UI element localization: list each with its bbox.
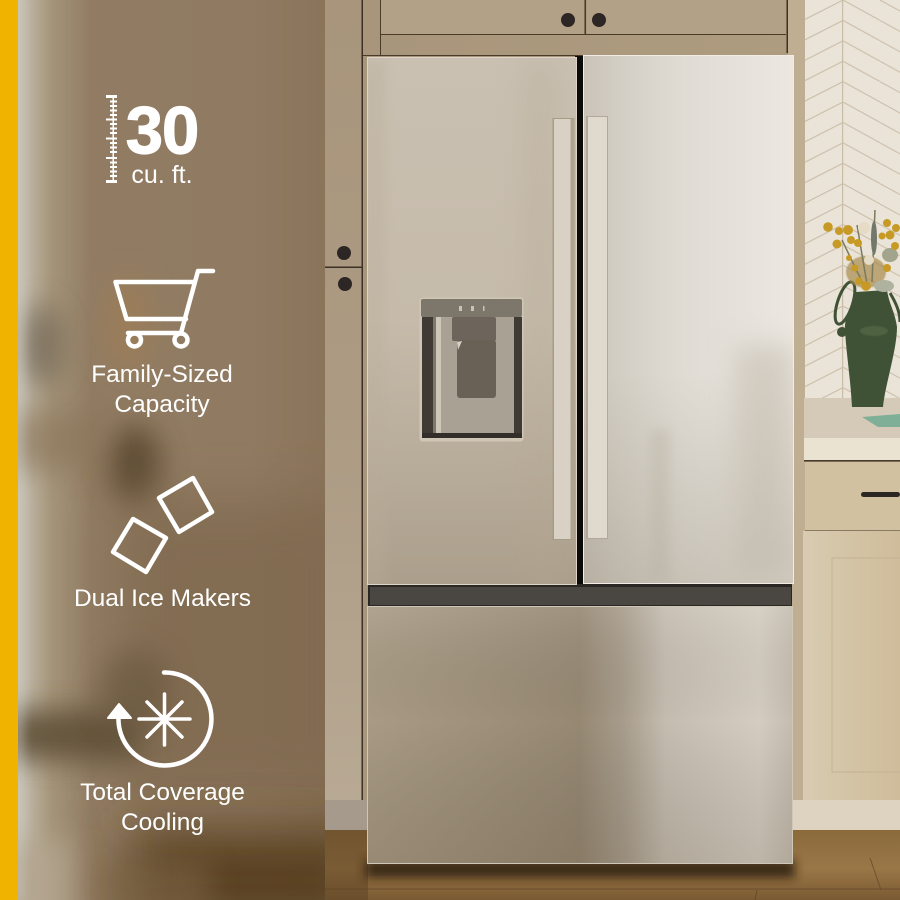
vase body: [831, 280, 900, 407]
feature: total coverage cooling: [80, 672, 245, 836]
right door: [583, 55, 795, 584]
dispenser paddle: [452, 317, 496, 398]
feature label: Total Coverage: [80, 779, 245, 806]
bottom freezer drawer: [367, 606, 793, 864]
vase with dried flowers: [823, 210, 900, 407]
right handle: [586, 116, 608, 539]
blurred side panel background: [18, 0, 325, 900]
side trim: [788, 0, 805, 800]
icon: cooling arc with snowflake: [108, 672, 211, 765]
icon: ice cubes: [113, 478, 212, 572]
icon: shopping cart: [116, 271, 213, 346]
upper cabinets: [363, 0, 805, 56]
refrigerator: [360, 55, 795, 864]
dispenser recess: [422, 317, 522, 437]
feature label: Cooling: [121, 809, 204, 836]
capacity unit: cu. ft.: [131, 161, 193, 189]
kitchen background: [325, 0, 900, 900]
left door: [360, 57, 577, 590]
feature label: Family-Sized: [91, 361, 233, 388]
dispenser control icons: [459, 306, 484, 311]
feature: 30 cu. ft.: [106, 94, 198, 189]
door gap: [575, 56, 585, 586]
left handle: [552, 118, 574, 540]
feature: family-sized capacity: [91, 271, 233, 418]
chevron backsplash: [805, 0, 900, 400]
feature label: Dual Ice Makers: [74, 585, 251, 612]
countertop: [804, 398, 900, 462]
icon: ruler: [106, 95, 117, 183]
feature: dual ice makers: [74, 478, 251, 612]
yellow accent strip: [0, 0, 18, 900]
capacity number: 30: [126, 94, 198, 168]
base drawer and door: [793, 462, 900, 832]
left cabinet: [325, 0, 368, 830]
water and ice dispenser: [420, 298, 524, 442]
wood floor: [325, 830, 900, 900]
freezer toe band: [368, 584, 792, 607]
floor shadow: [365, 860, 795, 878]
feature label: Capacity: [114, 391, 210, 418]
bouquet: [823, 210, 900, 292]
